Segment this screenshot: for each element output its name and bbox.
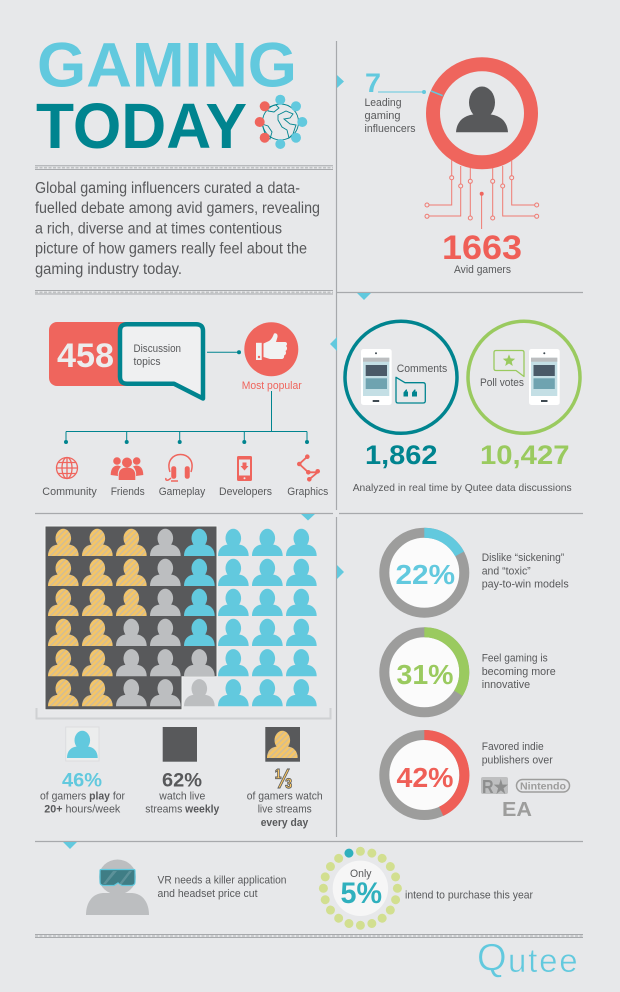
- circuit lines: [425, 160, 539, 229]
- icon: headset: [166, 454, 192, 481]
- legend: play 46%: 46%: [62, 770, 102, 792]
- icon: quote bubble: [396, 377, 425, 403]
- icon: graphics nodes: [297, 454, 320, 482]
- panel: poll votes: Poll votes: [480, 377, 524, 389]
- donut: 42%: [384, 735, 464, 815]
- speech bubble: topics: [134, 356, 161, 368]
- most popular label: Most popular: [242, 380, 302, 392]
- chart: dot ring 5%: [319, 847, 402, 930]
- icon: community globe: [56, 458, 78, 478]
- gamers count: Avid gamers: [454, 264, 511, 276]
- 458 badge: 458: [57, 337, 114, 375]
- logo: Qutee: Q: [477, 937, 507, 979]
- legend: weekly 62%: watch live: [158, 790, 205, 802]
- panel: influencers and gamers: [364, 64, 539, 276]
- legend: daily one third: [247, 727, 323, 829]
- topic labels: Friends: [111, 486, 145, 498]
- publisher logos: R★: [482, 777, 509, 797]
- legend: weekly 62%: streams weekly: [145, 804, 220, 816]
- text: innovative: innovative: [482, 679, 530, 691]
- VR text: [158, 874, 286, 900]
- icon: phone: [361, 349, 392, 405]
- icon: friends: [111, 457, 143, 480]
- title: [36, 30, 297, 162]
- icon: developers phone: [237, 456, 252, 481]
- donut: 22%: [384, 533, 464, 613]
- chart: people pictogram: [45, 526, 317, 710]
- legend: play 46%: [40, 727, 125, 816]
- intro text: a rich, diverse and at times contentious: [35, 220, 282, 238]
- panel: discussion topics: [42, 322, 329, 498]
- cyan people: [184, 529, 317, 706]
- influencer count: gaming: [364, 110, 400, 122]
- panel: poll votes: [468, 321, 580, 470]
- logo: Qutee: utee: [508, 942, 579, 979]
- yellow daily viewers: [48, 529, 147, 706]
- VR text: and headset price cut: [158, 888, 258, 900]
- intro text: [35, 180, 320, 278]
- text: pay to win: and “toxic”: [482, 565, 531, 577]
- topic tree: [64, 391, 309, 444]
- publisher logos: Nintendo: [520, 782, 566, 792]
- topic labels: Developers: [219, 486, 272, 498]
- icon: ring with person: [431, 64, 531, 162]
- icon: phone: [529, 349, 560, 405]
- legend: play 46%: of gamers play for: [40, 790, 125, 802]
- chart: dot ring 5%: Only: [350, 868, 372, 880]
- influencer count: [364, 68, 426, 135]
- topic labels: Graphics: [287, 486, 329, 498]
- publisher logos: EA: [502, 799, 532, 821]
- topic labels: Gameplay: [159, 486, 206, 498]
- text: indie publishers: publishers over: [482, 754, 553, 766]
- influencer count: influencers: [364, 123, 416, 135]
- topic labels: [42, 486, 329, 498]
- legend: daily one third: every day: [261, 817, 309, 829]
- grey people: [116, 529, 215, 706]
- text: pay to win: pay-to-win models: [482, 578, 569, 590]
- panel: VR: [86, 847, 533, 930]
- donut: 31%: [384, 632, 464, 712]
- panel: comments: [345, 321, 457, 470]
- donut: 31%: 31%: [396, 659, 454, 690]
- comments count: 1,862: [365, 440, 438, 470]
- speech bubble: [120, 324, 203, 398]
- text: pay to win: [482, 552, 569, 590]
- publisher logos: [481, 777, 570, 821]
- icon: star bubble: [494, 350, 524, 376]
- text: innovative: [482, 653, 556, 691]
- icon: globe network: [255, 95, 307, 149]
- topic labels: Community: [42, 486, 97, 498]
- legend: play 46%: 20+ hours/week: [44, 804, 121, 816]
- icon: thumbs up: [244, 322, 298, 376]
- intro text: Global gaming influencers curated a data-: [35, 180, 300, 197]
- gamers count: 1663: [442, 229, 522, 267]
- title: TODAY: [36, 90, 247, 162]
- 458 badge: [49, 322, 139, 386]
- icon: person with VR headset: [86, 860, 149, 915]
- influencer count: 7: [365, 68, 381, 98]
- VR text: VR needs a killer application: [158, 874, 286, 886]
- chart: dot ring 5%: 5%: [340, 877, 382, 910]
- legend: daily one third: of gamers watch: [247, 790, 323, 802]
- text: innovative: Feel gaming is: [482, 653, 548, 665]
- text: innovative: becoming more: [482, 666, 556, 678]
- intro text: picture of how gamers really feel about the: [35, 240, 307, 258]
- intro text: gaming industry today.: [35, 261, 182, 278]
- data source note: Analyzed in real time by Qutee data discussions: [353, 482, 572, 494]
- poll votes count: 10,427: [480, 440, 570, 470]
- title: GAMING: [37, 30, 297, 100]
- donut: 22%: 22%: [396, 559, 455, 590]
- legend: daily one third: live streams: [258, 804, 312, 816]
- legend: daily one third: ⅓: [274, 763, 292, 794]
- legend: weekly 62%: [145, 727, 220, 816]
- influencer count: Leading: [364, 97, 402, 109]
- donut: 42%: 42%: [396, 762, 454, 793]
- text: indie publishers: [482, 741, 553, 766]
- speech bubble: Discussion: [134, 343, 181, 355]
- intro text: fuelled debate among avid gamers, revealing: [35, 200, 320, 217]
- legend: weekly 62%: 62%: [162, 770, 202, 792]
- text: indie publishers: Favored indie: [482, 741, 544, 753]
- panel: comments: Comments: [397, 363, 448, 375]
- purchase text: intend to purchase this year: [405, 890, 533, 902]
- text: pay to win: Dislike “sickening”: [482, 552, 565, 564]
